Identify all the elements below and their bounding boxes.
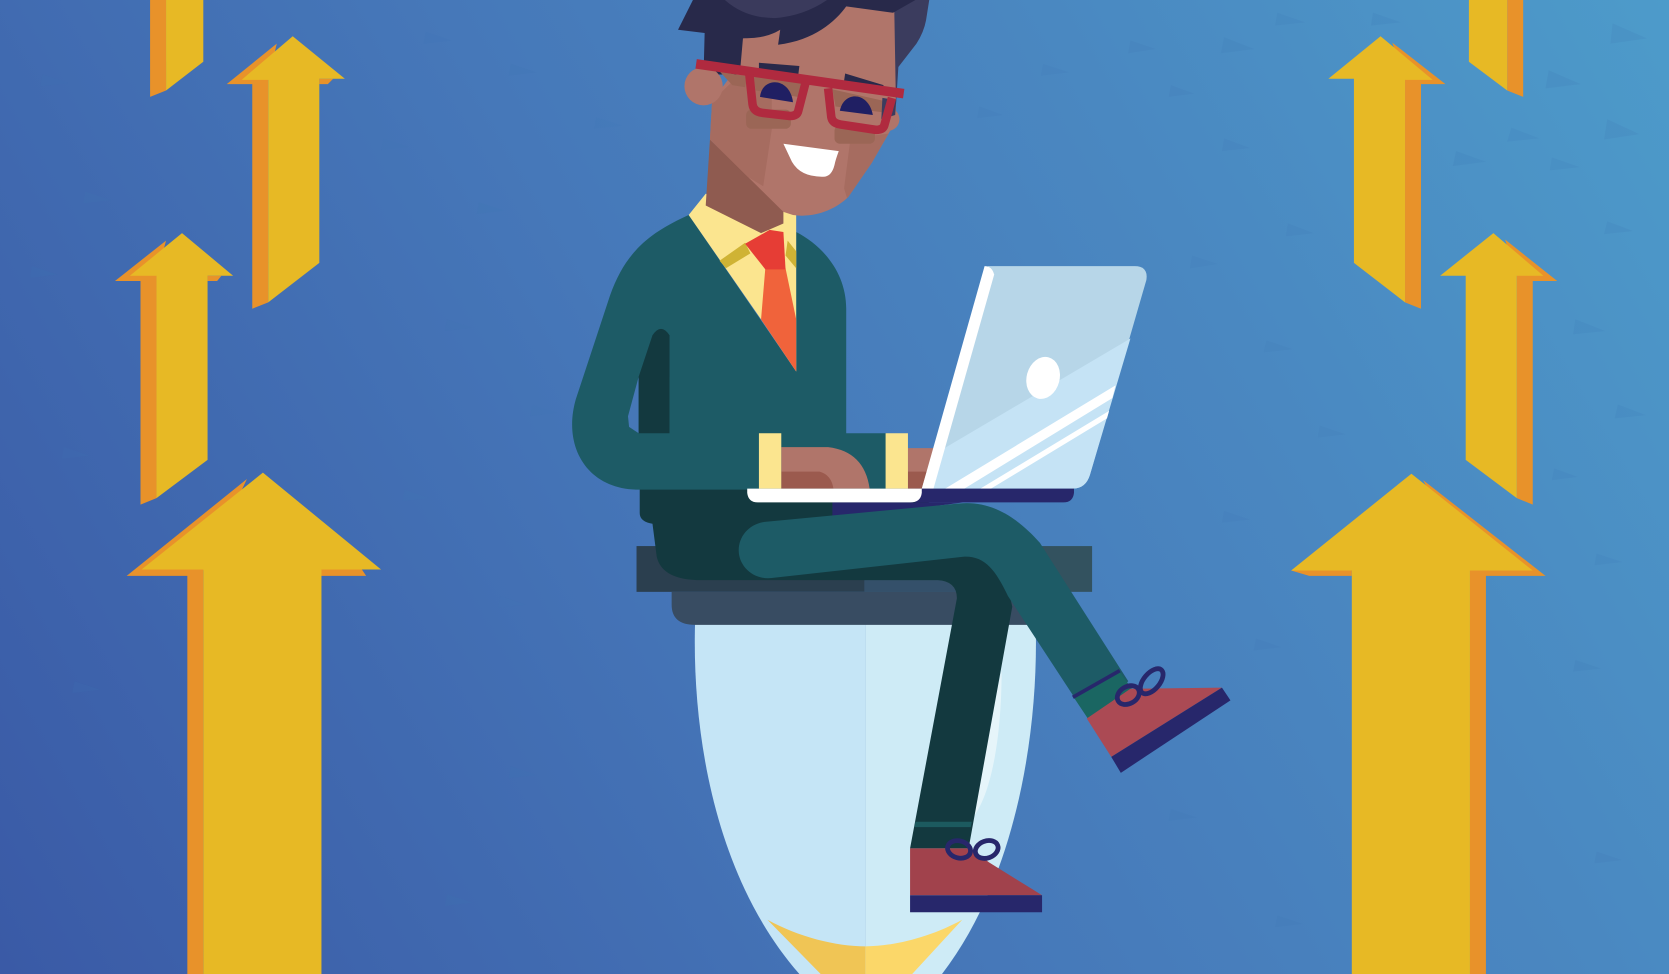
glasses <box>696 64 904 130</box>
laptop base white <box>747 489 922 502</box>
shirt cuffs <box>759 433 781 489</box>
laptop <box>747 266 1147 519</box>
rocket highlight <box>973 671 1002 818</box>
laptop logo <box>1022 353 1065 403</box>
arrow: middle right <box>1440 233 1557 505</box>
neck <box>706 139 783 233</box>
eyebrows <box>759 63 883 94</box>
lid edge <box>922 266 994 489</box>
laptop underside <box>832 502 963 519</box>
shirt collar <box>689 194 796 372</box>
arrow: upper left <box>227 36 345 309</box>
ear right <box>876 108 899 131</box>
torso and arm <box>572 215 887 490</box>
mouth <box>783 144 839 177</box>
arrow: top right partial <box>1469 0 1523 97</box>
laptop base navy <box>915 489 1074 502</box>
cuffs and hands <box>759 433 935 489</box>
ear left <box>684 67 723 105</box>
tie <box>745 230 796 372</box>
rocket <box>695 623 1036 974</box>
arrow: middle left <box>115 233 233 505</box>
arrow: upper right <box>1328 36 1445 309</box>
sock stripe <box>1073 671 1120 697</box>
lid reflection <box>929 339 1130 489</box>
face <box>710 0 896 216</box>
head <box>678 0 929 233</box>
hair front <box>678 0 915 75</box>
lower shoe <box>910 837 1042 912</box>
arm gap <box>628 377 639 433</box>
face side shade <box>703 75 892 202</box>
laptop lid <box>922 266 1147 489</box>
hair bun <box>725 0 827 18</box>
raised shoe <box>1087 665 1230 773</box>
collar shading <box>720 241 796 268</box>
seat <box>637 546 1092 625</box>
arrow: top left partial <box>150 0 203 97</box>
rocket flame <box>767 920 962 974</box>
hand behind laptop <box>908 448 935 489</box>
arrow: large lower right <box>1291 474 1546 974</box>
skin shadows <box>720 71 890 144</box>
lower leg dark trousers <box>640 489 1012 848</box>
upper leg <box>739 503 1128 716</box>
lower shoe laces <box>946 837 1001 861</box>
lid streaks <box>945 385 1116 489</box>
hair back <box>852 0 929 117</box>
raised sock <box>1073 671 1133 719</box>
raised shoe laces <box>1114 665 1167 708</box>
inner arm shadow <box>639 329 670 433</box>
hair behind right lens <box>881 98 896 119</box>
eyes <box>760 82 873 115</box>
front hand <box>781 447 870 489</box>
trouser cuff stripe <box>914 822 972 827</box>
arrow: large lower left <box>127 473 381 974</box>
